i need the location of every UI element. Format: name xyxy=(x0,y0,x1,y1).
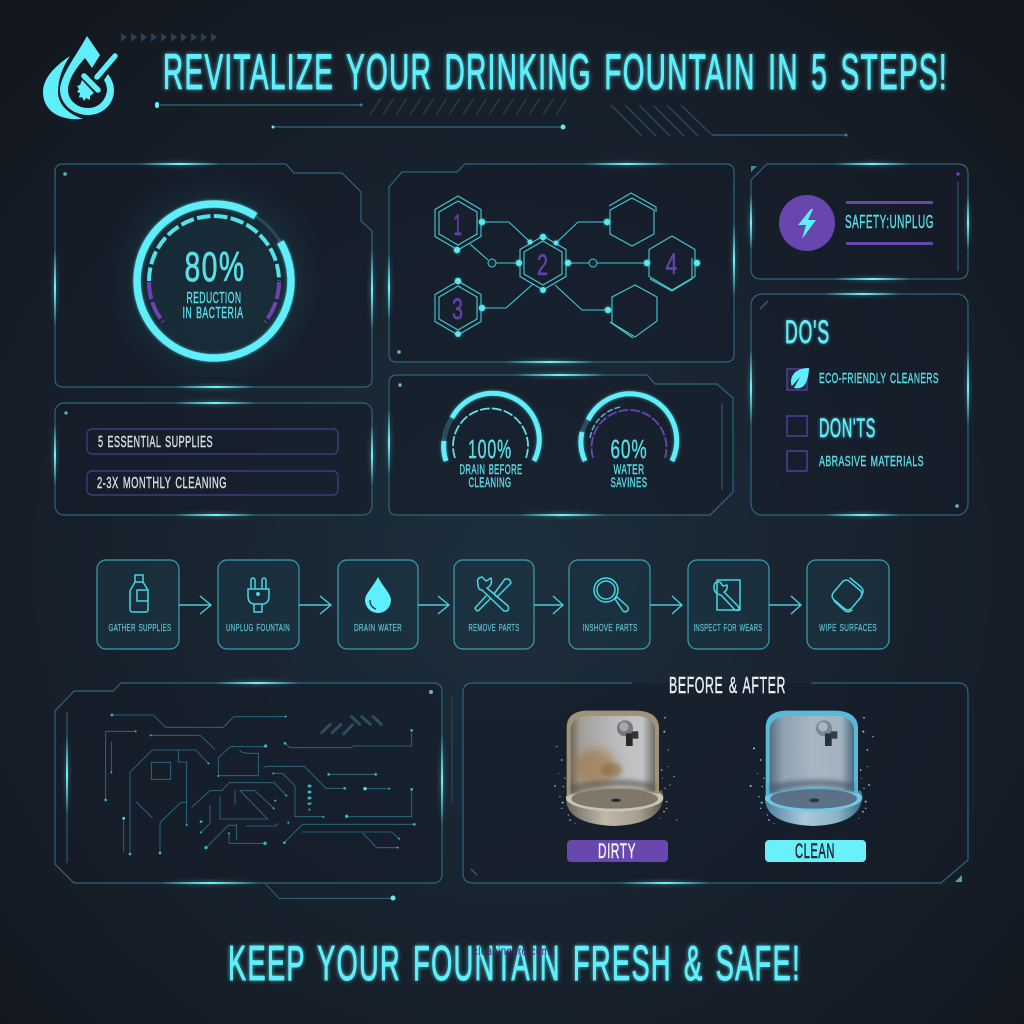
step 6: inspect for wears: INSPECT FOR WEARS xyxy=(694,622,762,634)
network connectors xyxy=(470,222,647,310)
step 6: inspect for wears xyxy=(688,560,769,649)
lower panel highlights xyxy=(66,682,710,884)
step 7: wipe surfaces xyxy=(807,560,889,649)
pill: monthly cleaning: 2-3X MONTHLY CLEANING xyxy=(97,475,227,492)
panel: bacteria gauge xyxy=(55,164,372,387)
label: dirty xyxy=(567,840,668,863)
big stat: 80% xyxy=(184,243,246,290)
arrow xyxy=(534,596,563,614)
step 5: inshove parts: INSHOVE PARTS xyxy=(582,622,638,634)
don't item: ABRASIVE MATERIALS xyxy=(819,453,924,470)
hexagon 1: 1 xyxy=(454,209,462,242)
gauge: water savings: 60% xyxy=(610,434,648,464)
arrow xyxy=(650,596,682,614)
stat caption: IN BACTERIA xyxy=(182,305,244,322)
safety label: SAFETY:UNPLUG xyxy=(845,212,934,232)
pill: supplies: 5 ESSENTIAL SUPPLIES xyxy=(98,434,213,451)
step 1: gather supplies: GATHER SUPPLIES xyxy=(108,622,172,634)
circuit traces xyxy=(104,714,416,898)
hexagon 3 xyxy=(435,281,481,335)
hexagon 2 xyxy=(520,236,566,290)
do's heading: DO'S xyxy=(785,314,830,350)
gauge: drain xyxy=(444,393,539,490)
stat caption xyxy=(182,290,244,322)
hexagon 2: 2 xyxy=(537,249,549,282)
logo: water drop with brush xyxy=(43,36,115,119)
hexagon upper right xyxy=(609,193,656,246)
gauge: water savings: SAVINES xyxy=(610,474,648,490)
header accent dots xyxy=(155,102,848,136)
network nodes xyxy=(454,219,700,337)
process steps xyxy=(97,560,889,649)
panel: stat gauges xyxy=(389,375,733,515)
gauge: drain: DRAIN BEFORE xyxy=(460,461,522,477)
checkbox xyxy=(787,451,807,471)
safety label xyxy=(845,201,934,245)
panel: supplies and frequency xyxy=(55,403,372,515)
image: clean fountain xyxy=(750,711,874,826)
don'ts heading: DON'TS xyxy=(819,413,876,443)
arrow xyxy=(769,596,801,614)
hexagon 4 xyxy=(649,236,695,291)
stat caption: REDUCTION xyxy=(186,290,242,307)
checkbox xyxy=(787,416,807,436)
gauge: water savings: WATER xyxy=(614,461,644,477)
step 1: gather supplies xyxy=(97,560,179,649)
pill: supplies xyxy=(87,429,338,454)
step 7: wipe surfaces: WIPE SURFACES xyxy=(819,622,877,634)
panel: circuit board xyxy=(55,683,452,900)
hexagon lower right xyxy=(610,285,657,338)
hexagon 1 xyxy=(435,196,481,250)
gauge: drain: 100% xyxy=(468,434,512,464)
panel: hexagon network xyxy=(389,164,734,362)
arrow xyxy=(179,596,211,614)
step 5: inshove parts xyxy=(569,560,650,649)
arrow xyxy=(299,596,331,614)
image: dirty fountain xyxy=(554,711,677,826)
before and after heading: BEFORE & AFTER xyxy=(669,672,786,698)
step 4: remove parts: REMOVE PARTS xyxy=(468,622,520,634)
step 4: remove parts xyxy=(454,560,534,649)
label: clean: CLEAN xyxy=(795,840,835,863)
gauge: water savings xyxy=(581,394,677,490)
hexagon 3: 3 xyxy=(452,293,464,326)
watermark: cleaningpro.com xyxy=(473,944,550,958)
arrow xyxy=(418,596,449,614)
decorative chevrons xyxy=(121,33,217,42)
panel: before and after xyxy=(463,672,968,883)
panel: do's and don'ts xyxy=(751,294,968,515)
step 3: drain water xyxy=(338,560,418,649)
panel highlights xyxy=(54,163,969,516)
step 2: unplug fountain: UNPLUG FOUNTAIN xyxy=(226,622,290,634)
icon: leaf check xyxy=(787,368,809,390)
icon: lightning bolt xyxy=(779,195,835,251)
header accent lines xyxy=(160,98,846,136)
gauge: drain: CLEANING xyxy=(468,474,512,490)
step 2: unplug fountain xyxy=(218,560,299,649)
ring gauge xyxy=(109,176,319,386)
step 3: drain water: DRAIN WATER xyxy=(354,622,402,634)
label: dirty: DIRTY xyxy=(598,840,636,863)
label: clean xyxy=(765,840,866,863)
panel: safety xyxy=(751,164,968,279)
pill: monthly cleaning xyxy=(87,471,338,495)
open nodes xyxy=(488,259,597,267)
hexagon 4: 4 xyxy=(666,248,678,281)
